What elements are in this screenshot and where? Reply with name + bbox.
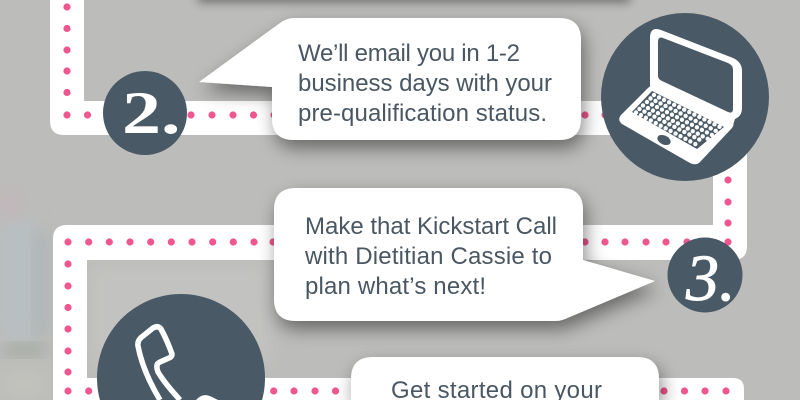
dotted path: step 3 <box>53 150 747 400</box>
icon: laptop <box>601 13 769 181</box>
speech bubble: step 3 <box>274 188 655 321</box>
step 2 number badge <box>103 71 187 155</box>
dotted path: step 2 <box>50 0 620 135</box>
speech bubble: step 2: business days with your <box>298 70 552 97</box>
step 3 number badge: 3. <box>685 242 736 315</box>
speech bubble: step 3: plan what’s next! <box>305 273 486 300</box>
icon: telephone <box>97 294 265 400</box>
speech bubble: step 3: Make that Kickstart Call <box>305 213 557 240</box>
background <box>6 0 635 358</box>
speech bubble: step 4 <box>351 357 659 400</box>
shadow of previous speech bubble <box>198 0 630 2</box>
speech bubble: step 3: with Dietitian Cassie to <box>304 243 552 270</box>
speech bubble: step 2 <box>199 18 581 140</box>
step 2 number badge: 2. <box>122 80 180 147</box>
speech bubble: step 2: We’ll email you in 1-2 <box>298 40 520 67</box>
step 3 number badge <box>668 238 742 315</box>
speech bubble: step 2: pre-qualification status. <box>298 100 547 127</box>
